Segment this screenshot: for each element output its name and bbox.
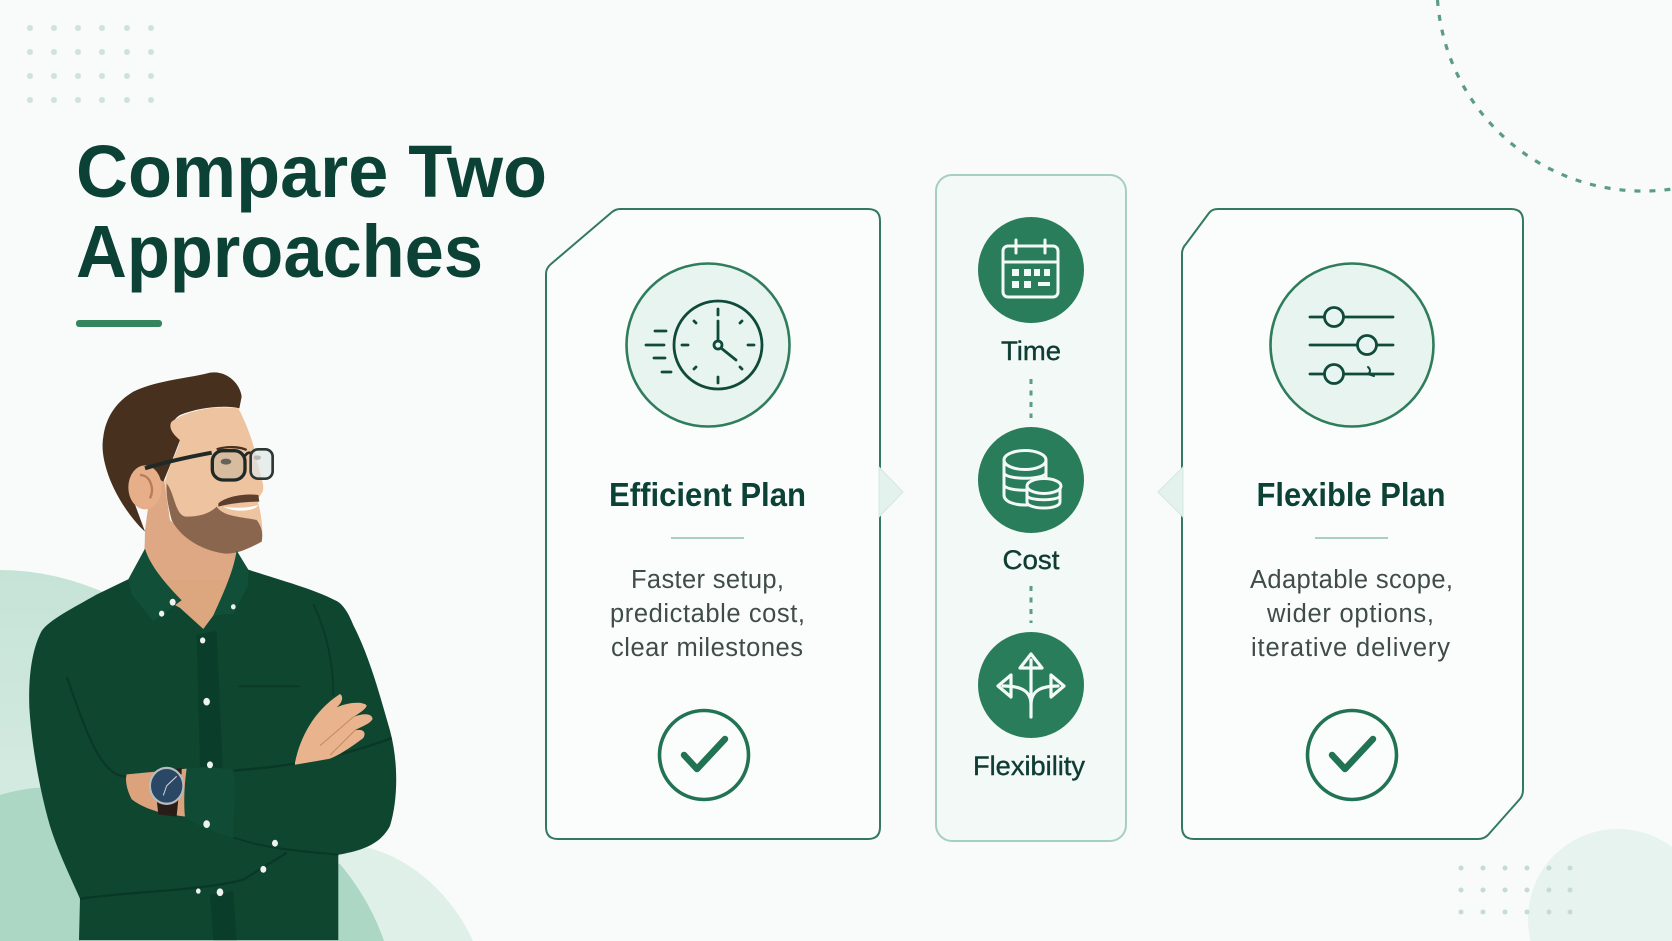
- title: Approaches: [76, 210, 483, 293]
- title: [76, 130, 547, 293]
- wrist: [126, 769, 187, 816]
- description: clear milestones: [611, 634, 803, 662]
- dashed arc: top right: [1438, 0, 1672, 191]
- label: Flexibility: Flexibility: [973, 751, 1085, 781]
- background blobs: [0, 570, 473, 941]
- hand: [295, 694, 373, 765]
- description: iterative delivery: [1251, 634, 1450, 662]
- icon: calendar: [978, 217, 1084, 323]
- pointer to centre: [879, 467, 903, 517]
- card: Flexible Plan: [1158, 209, 1523, 839]
- panel: criteria: [936, 175, 1126, 841]
- watch: [150, 768, 183, 816]
- description: predictable cost,: [610, 600, 805, 628]
- description: Faster setup,: [631, 566, 784, 594]
- divider: [1315, 537, 1388, 539]
- head: [103, 372, 273, 580]
- panel background: [936, 175, 1126, 841]
- pointer to centre: [1158, 467, 1183, 517]
- buttons: [159, 599, 278, 896]
- icon: check: [1308, 710, 1396, 800]
- card: Efficient Plan: [546, 209, 903, 839]
- dotted connector: [1030, 379, 1032, 418]
- collar: [128, 549, 182, 621]
- label: Cost: Cost: [1002, 545, 1060, 575]
- dotted connector: [1030, 586, 1032, 623]
- neck: [145, 549, 248, 631]
- icon: check: [660, 710, 748, 800]
- shirt and arms: [29, 549, 396, 940]
- title underline: [76, 320, 162, 327]
- divider: [671, 537, 744, 539]
- icon: sliders: [1270, 264, 1434, 426]
- illustration: man with crossed arms: [29, 372, 396, 940]
- card outline: [546, 209, 880, 839]
- cuff: [184, 767, 235, 838]
- heading: Flexible Plan: [1256, 476, 1446, 513]
- title: Compare Two: [76, 130, 547, 213]
- icon: coins: [978, 427, 1084, 533]
- description: Adaptable scope,: [1250, 566, 1453, 594]
- circle: bottom right: [1528, 829, 1672, 941]
- description: [1250, 566, 1453, 662]
- dot grid: bottom right: [1458, 866, 1572, 914]
- icon: clock: [626, 264, 790, 426]
- description: wider options,: [1266, 600, 1434, 628]
- card outline: [1182, 209, 1523, 839]
- description: [610, 566, 805, 662]
- dot grid: top left: [27, 25, 154, 103]
- heading: Efficient Plan: [609, 476, 806, 513]
- icon: arrows: [978, 632, 1084, 738]
- label: Time: Time: [1001, 336, 1061, 366]
